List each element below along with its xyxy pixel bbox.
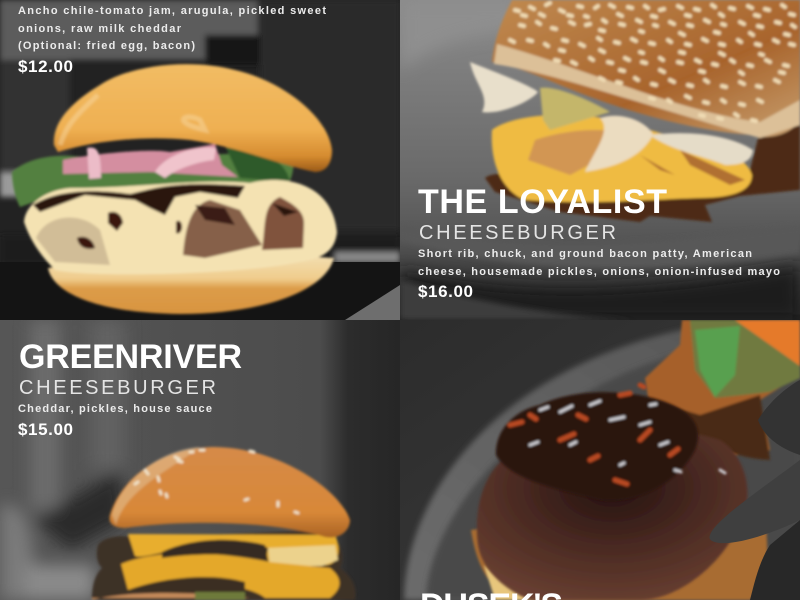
heading: Greenriver: GREENRIVER [19,338,242,376]
panel: The Loyalist [400,0,800,320]
text block: Loyalist description [418,248,780,278]
icon: chile jam topping [496,385,725,501]
heading: The Loyalist: THE LOYALIST [418,183,667,221]
text block: Loyalist description: cheese, housemade pickles, onions, onion-infused mayo [418,266,780,278]
text block: first burger description: (Optional: fried egg, bacon) [18,40,195,52]
text block: first burger description [18,5,326,52]
icon: Greenriver burger [92,447,356,600]
icon: loyalist burger [470,0,800,222]
sesame seeds [510,3,795,121]
panel: Dusek's [400,320,800,600]
subheading: cheeseburger: CHEESEBURGER [419,222,616,244]
text block: Loyalist description: Short rib, chuck, and ground bacon patty, American [418,248,752,260]
panel: first cheeseburger [0,0,400,320]
price: first burger: $12.00 [18,57,73,76]
icon: beef patty [477,428,748,600]
subheading: cheeseburger: CHEESEBURGER [19,377,216,399]
panel: Greenriver [0,320,400,600]
text block: Greenriver description: Cheddar, pickles, house sauce [18,403,212,415]
price: Loyalist: $16.00 [418,282,473,301]
icon: black gloved hand [709,380,800,600]
sesame seeds [135,450,298,513]
icon: first burger [12,64,337,314]
text block: first burger description: onions, raw milk cheddar [18,23,182,35]
text block: first burger description: Ancho chile-tomato jam, arugula, pickled sweet [18,5,326,17]
icon: background burger [645,320,800,460]
price: Greenriver: $15.00 [18,420,73,439]
icon: lower bun [470,528,769,600]
